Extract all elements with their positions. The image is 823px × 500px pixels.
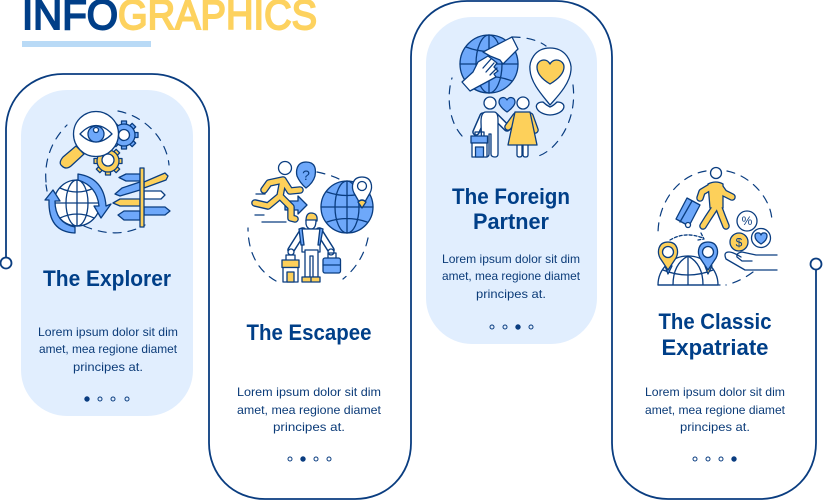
icon: escapee — [248, 162, 373, 282]
heading: classic expatriate — [658, 309, 772, 360]
step dots 4 — [693, 457, 736, 461]
yellow gear — [94, 147, 122, 175]
percent coin: % — [742, 214, 753, 228]
step dots 3 — [490, 325, 533, 329]
globe base — [658, 256, 720, 285]
icon: explorer — [45, 111, 170, 233]
text: classic expatriate: amet, mea regione diamet — [645, 403, 786, 417]
traveller — [288, 213, 334, 282]
text: classic expatriate: principes at. — [680, 420, 750, 434]
magnifier lens — [74, 112, 118, 156]
panel: explorer background — [21, 90, 193, 416]
blue pin — [699, 242, 717, 274]
left connector node — [0, 258, 12, 268]
icon: foreign partner — [449, 35, 574, 157]
step dots 2 — [288, 457, 331, 461]
step dots 1 — [85, 397, 129, 401]
yellow pin — [659, 242, 677, 274]
right connector node — [810, 258, 822, 270]
text: escapee: amet, mea regione diamet — [237, 403, 382, 417]
text: foreign partner: amet, mea regione diamet — [442, 269, 581, 283]
text: explorer: principes at. — [73, 360, 143, 374]
title underline — [22, 41, 151, 47]
text: foreign partner: principes at. — [476, 287, 546, 301]
suitcase yellow — [282, 255, 299, 282]
text: escapee: principes at. — [273, 420, 345, 434]
heading: escapee: The Escapee — [246, 320, 372, 345]
globe — [321, 181, 373, 233]
briefcase blue — [323, 253, 340, 273]
signs — [113, 168, 170, 227]
dashed travel arrow — [670, 233, 704, 240]
text: escapee: Lorem ipsum dolor sit dim — [237, 385, 381, 399]
text: explorer — [38, 325, 178, 374]
man — [476, 97, 507, 157]
head — [710, 168, 722, 178]
icon: classic expatriate — [658, 168, 777, 285]
walker — [700, 182, 732, 226]
runner — [255, 162, 300, 222]
heading: explorer: The Explorer — [43, 266, 171, 291]
question pin: ? — [302, 167, 310, 183]
panel: foreign partner background — [426, 17, 597, 344]
hand — [725, 252, 777, 270]
blue gear — [110, 121, 138, 149]
title — [22, 0, 317, 38]
text: classic expatriate: Lorem ipsum dolor sit dim — [645, 385, 785, 399]
heading: classic expatriate: The Classic — [658, 309, 772, 334]
heart — [499, 98, 515, 112]
suitcase — [676, 198, 700, 228]
text: explorer: amet, mea regione diamet — [39, 342, 178, 356]
heading: foreign partner: The Foreign — [452, 184, 570, 209]
text: escapee — [237, 385, 382, 434]
heading: classic expatriate: Expatriate — [662, 335, 768, 360]
globe — [54, 180, 100, 226]
woman — [508, 97, 537, 157]
heart pin — [530, 48, 571, 115]
shaking hands — [462, 37, 518, 91]
text: foreign partner — [442, 252, 581, 301]
globe — [460, 35, 518, 93]
text: classic expatriate — [645, 385, 786, 434]
magnifier handle — [60, 146, 84, 168]
arrow — [285, 196, 307, 214]
heart coin — [752, 228, 770, 248]
text: foreign partner: Lorem ipsum dolor sit dim — [442, 252, 580, 266]
suitcase — [471, 132, 488, 157]
dollar coin: $ — [736, 236, 743, 250]
heading: foreign partner: Partner — [473, 209, 549, 234]
eye — [80, 126, 112, 142]
location pin — [353, 177, 371, 208]
text: explorer: Lorem ipsum dolor sit dim — [38, 325, 178, 339]
circular arrows — [45, 174, 111, 233]
heading: foreign partner — [452, 184, 570, 234]
